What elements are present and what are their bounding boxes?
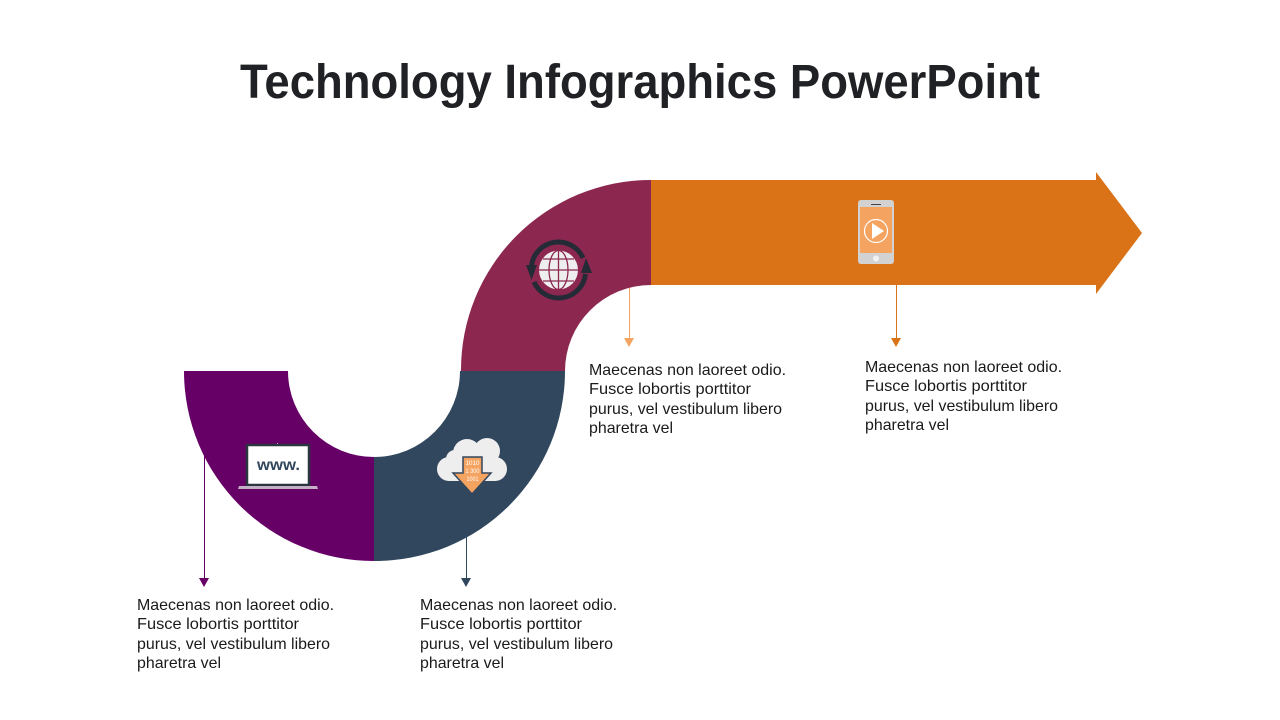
icon: cloud download: 1 300: [466, 469, 480, 475]
segment: maroon arc: [461, 180, 651, 371]
text block: maroon step: pharetra vel: [589, 420, 673, 437]
text block: purple step: purus, vel vestibulum libero: [137, 636, 330, 653]
text block: navy step: pharetra vel: [420, 655, 504, 672]
text block: purple step: [137, 597, 334, 672]
connector: peach arrow: [624, 288, 634, 347]
text block: maroon step: Fusce lobortis porttitor: [589, 381, 752, 398]
connector: orange arrow: [891, 284, 901, 347]
icon: cloud download: 1010: [466, 461, 480, 467]
text block: purple step: Fusce lobortis porttitor: [137, 616, 300, 633]
text block: navy step: Fusce lobortis porttitor: [420, 616, 583, 633]
segment: orange arrow: [651, 172, 1142, 294]
text block: navy step: [420, 597, 617, 672]
text block: purple step: Maecenas non laoreet odio.: [137, 597, 334, 614]
text block: orange step: Fusce lobortis porttitor: [865, 378, 1028, 395]
text block: orange step: pharetra vel: [865, 417, 949, 434]
text block: purple step: pharetra vel: [137, 655, 221, 672]
icon: globe with arrows: [526, 242, 592, 298]
title: Technology Infographics PowerPoint: [240, 56, 1040, 109]
icon: smartphone play: [858, 200, 894, 264]
text block: orange step: Maecenas non laoreet odio.: [865, 359, 1062, 376]
icon: laptop www: [238, 443, 318, 489]
segment: purple arc: [184, 371, 374, 561]
text block: maroon step: purus, vel vestibulum libero: [589, 401, 782, 418]
text block: navy step: Maecenas non laoreet odio.: [420, 597, 617, 614]
text block: maroon step: Maecenas non laoreet odio.: [589, 362, 786, 379]
text block: orange step: [865, 359, 1062, 434]
segment: navy arc: [374, 371, 565, 561]
text block: orange step: purus, vel vestibulum libero: [865, 398, 1058, 415]
icon: laptop www: www.: [256, 457, 300, 474]
connector: navy arrow: [461, 535, 471, 587]
icon: cloud download: 1001: [466, 477, 479, 483]
icon: cloud download: [437, 438, 507, 494]
text block: maroon step: [589, 362, 786, 437]
connector: purple arrow: [199, 455, 209, 587]
text block: navy step: purus, vel vestibulum libero: [420, 636, 613, 653]
